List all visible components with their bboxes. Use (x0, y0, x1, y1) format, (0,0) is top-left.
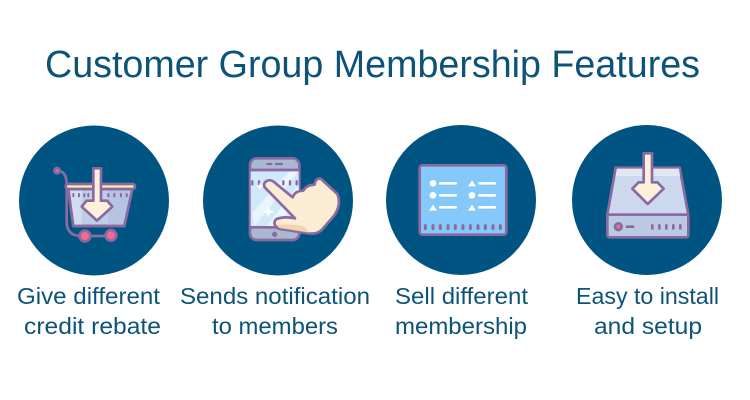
label: Give different credit rebate: credit rebate (24, 313, 161, 339)
circle background: drive (572, 125, 722, 275)
label: Sends notification to members: to members (212, 313, 338, 339)
label: Sends notification to members (180, 283, 370, 339)
label: Easy to install and setup (576, 283, 719, 339)
icon: membership list panel (420, 165, 506, 235)
label: Sell different membership (395, 283, 529, 339)
label: Give different credit rebate (17, 283, 161, 339)
feature: easy install (572, 125, 722, 339)
title: Customer Group Membership Features (45, 44, 700, 86)
icon: drive with download arrow (607, 153, 688, 237)
label: Easy to install and setup: and setup (594, 313, 702, 339)
icon: shopping basket with arrow (54, 168, 135, 241)
circle background: basket (19, 126, 169, 276)
label: Sends notification to members: Sends notification (180, 283, 370, 309)
label: Sell different membership: membership (395, 313, 527, 339)
circle background: list (386, 125, 536, 275)
feature: notifications (180, 126, 370, 339)
label: Give different credit rebate: Give different (17, 283, 161, 309)
feature: sell membership (386, 125, 536, 339)
icon: phone with pointing hand (250, 158, 339, 240)
circle background: phone (203, 126, 353, 276)
label: Easy to install and setup: Easy to install (576, 283, 719, 309)
feature: credit rebate (17, 126, 169, 339)
label: Sell different membership: Sell different (395, 283, 529, 309)
